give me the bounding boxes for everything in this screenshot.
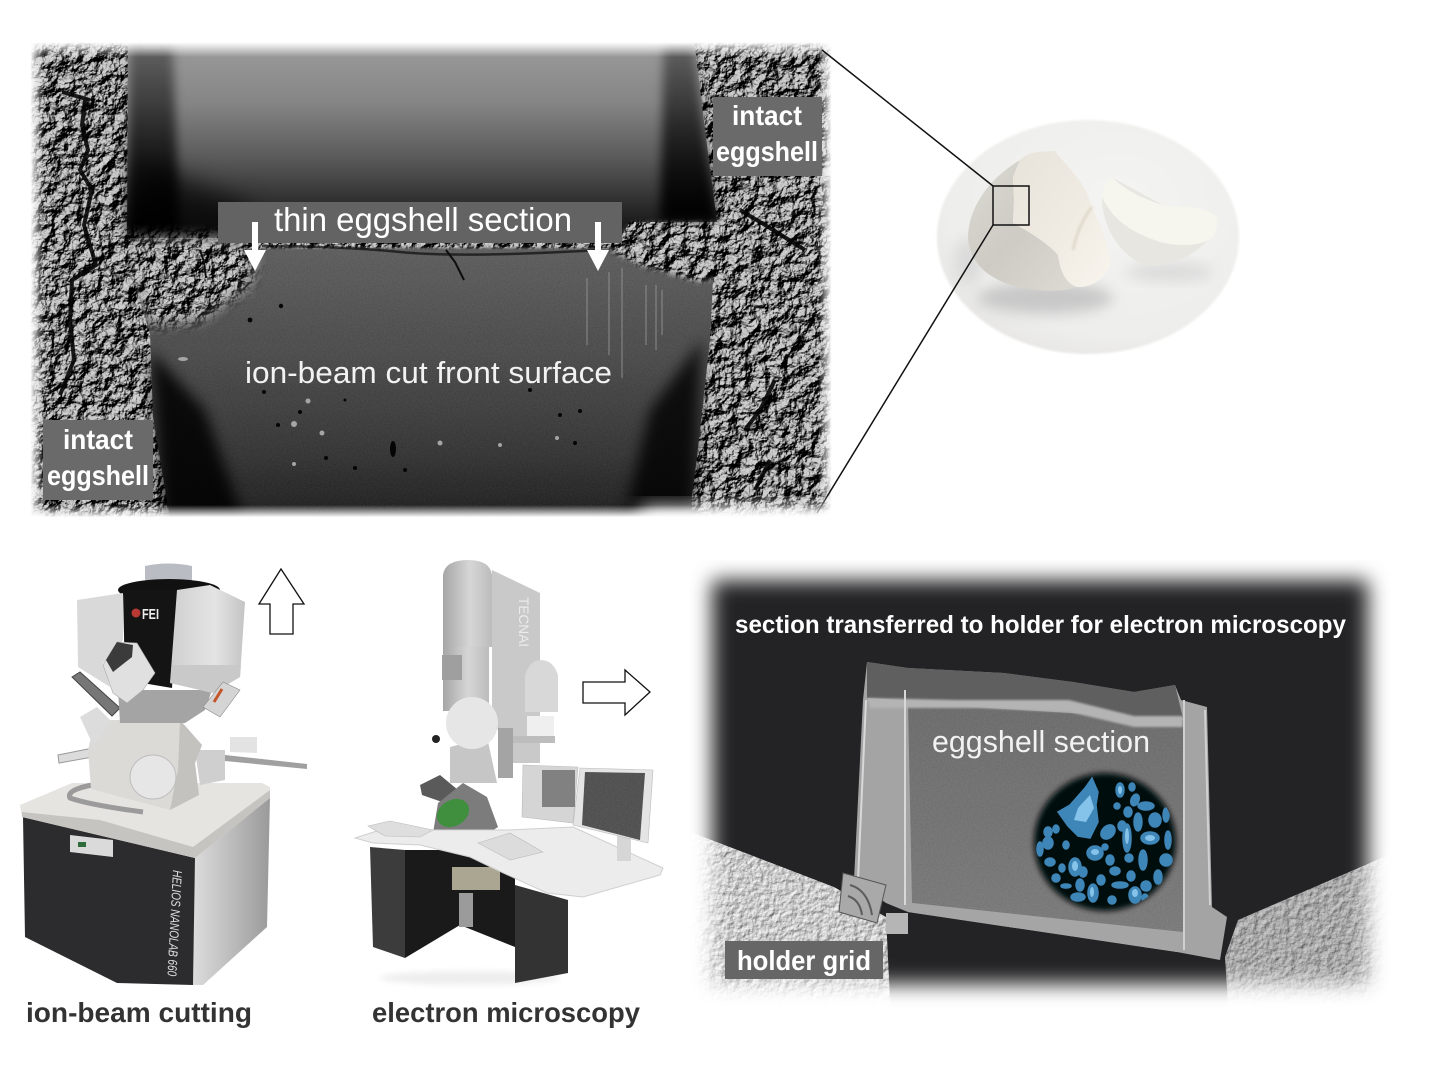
FEI brand: FEI — [142, 606, 159, 623]
icon: right outline arrow — [583, 670, 650, 715]
focus knob — [432, 735, 440, 743]
right detector — [203, 682, 240, 717]
bright pores — [178, 357, 559, 466]
crystal background — [1034, 773, 1176, 911]
right rod — [225, 755, 307, 769]
caption: ion-beam cutting: ion-beam cutting — [26, 997, 252, 1028]
intact eggshell label, upper right — [713, 97, 822, 176]
post under section — [886, 913, 908, 934]
model label: HELIOS NANOLAB 660 — [164, 870, 185, 977]
ion-beam microscope — [20, 564, 307, 985]
clamp swirl — [848, 885, 872, 915]
right monitor image — [582, 772, 645, 840]
feathered white vignette — [676, 544, 1404, 1020]
face lower-left shadow — [150, 350, 245, 525]
left wedge — [80, 707, 112, 745]
left strip highlights — [858, 690, 905, 905]
monitor stand — [617, 833, 631, 861]
middle column — [443, 647, 489, 711]
blue crystal circle — [1034, 773, 1176, 911]
pipe — [498, 728, 513, 778]
grid clamp — [839, 873, 886, 923]
transmission electron microscope — [355, 560, 663, 985]
crystal highlights — [1072, 786, 1155, 897]
right monitor frame — [573, 768, 653, 843]
intact eggshell label, upper right: intact — [732, 100, 802, 131]
central module — [103, 642, 155, 703]
lower body — [450, 737, 497, 783]
crystal blobs — [1037, 778, 1172, 904]
green viewing screen — [432, 793, 474, 833]
inner shell fold — [1073, 207, 1092, 250]
section frame — [854, 662, 1227, 960]
section label: eggshell section — [932, 724, 1150, 759]
left trench wall shadow — [128, 30, 180, 240]
upper column — [443, 560, 492, 647]
left arm — [72, 672, 120, 716]
thin section label — [218, 201, 622, 243]
dome — [433, 783, 498, 843]
right leg — [515, 885, 568, 983]
intact eggshell label, lower left: eggshell — [47, 460, 149, 491]
feathered edge: left — [10, 20, 44, 556]
chamber shade — [170, 720, 202, 810]
lens sphere — [446, 697, 498, 749]
bright crust band — [867, 698, 1183, 727]
module dark cap — [106, 642, 133, 672]
tank collar — [527, 716, 554, 736]
chamber door cylinder — [130, 755, 176, 799]
caption: electron microscopy: electron microscopy — [372, 997, 640, 1028]
panel heading: section transferred to holder for electron microscopy — [735, 611, 1346, 639]
shadow under small shell — [1126, 263, 1214, 281]
status indicator — [78, 842, 86, 847]
feathered edge: right — [818, 20, 852, 556]
surface label: ion-beam cut front surface — [245, 355, 612, 390]
TECNAI label: TECNAI — [516, 597, 532, 647]
ion-beam cut face — [130, 238, 715, 536]
chamber — [88, 720, 202, 810]
neck — [118, 690, 212, 723]
status panel — [70, 835, 113, 857]
rough intact eggshell surface — [14, 27, 848, 536]
cabinet side — [193, 797, 270, 985]
photo: broken eggshell — [937, 120, 1239, 354]
left hood — [77, 593, 123, 687]
section face — [908, 703, 1183, 932]
binocular — [420, 775, 458, 803]
icon: up outline arrow — [259, 569, 304, 634]
holder grid label: holder grid — [737, 945, 871, 976]
panel: ion-beam cut eggshell micrograph — [31, 42, 831, 517]
back tower — [492, 570, 540, 763]
large shell exterior — [968, 160, 1077, 291]
selection box on egg — [993, 186, 1029, 225]
side tank — [525, 660, 558, 712]
right hood — [170, 585, 245, 693]
thin section label: thin eggshell section — [274, 201, 572, 238]
left rod — [58, 748, 93, 763]
black column front — [123, 590, 178, 688]
section top crust — [867, 662, 1183, 720]
shadow under large shell — [977, 282, 1113, 314]
right strip highlights — [1184, 700, 1210, 950]
FEI logo dot — [132, 608, 140, 618]
milling streaks — [587, 268, 662, 378]
holder grid left — [680, 828, 891, 1020]
shadow left of large shell — [954, 238, 982, 286]
zoom lines from egg to micrograph — [817, 50, 993, 513]
floor shadow — [380, 971, 560, 985]
left down arrow — [244, 222, 266, 271]
black column top — [118, 579, 220, 601]
tan components — [452, 867, 500, 890]
column box — [442, 655, 462, 680]
right trench wall shadow — [660, 30, 717, 222]
cabinet top slab — [20, 783, 270, 858]
support arm — [513, 736, 555, 743]
lower side unit — [195, 750, 225, 785]
inner recess — [405, 850, 515, 958]
holder grid right — [1225, 850, 1400, 1020]
right down arrow — [587, 222, 609, 271]
small shell exterior — [1102, 178, 1217, 266]
cabinet front — [23, 817, 195, 985]
desk — [355, 827, 663, 897]
right hood lower band — [170, 665, 241, 693]
left monitor frame — [522, 765, 578, 823]
left leg — [370, 847, 405, 958]
milled trench — [127, 30, 717, 238]
detector stripe — [214, 689, 222, 702]
silver column cap — [145, 564, 192, 582]
handle loop — [69, 785, 143, 812]
rough rim — [122, 220, 720, 334]
left monitor image — [542, 770, 575, 807]
right side box — [230, 737, 257, 753]
intact eggshell label, lower left — [43, 420, 153, 500]
intact eggshell label, upper right: eggshell — [716, 136, 818, 167]
dark background — [690, 560, 1390, 1010]
edge cracks — [200, 246, 600, 280]
feathered edge: bottom — [10, 505, 852, 556]
small shell interior — [1102, 178, 1217, 245]
left keypad — [368, 821, 433, 837]
feathered edge: top — [10, 20, 852, 57]
intact eggshell label, lower left: intact — [63, 424, 133, 455]
eggshell surface cracks — [60, 92, 805, 490]
face lower-right shadow — [622, 340, 702, 525]
photo background — [937, 120, 1239, 354]
bottom band — [908, 903, 1181, 952]
central cylinder — [459, 893, 473, 927]
panel: section on holder — [676, 544, 1404, 1020]
slab front edge — [22, 790, 270, 858]
large shell interior — [1013, 151, 1110, 287]
dark pores — [248, 304, 582, 472]
trench lower-left shadow — [130, 160, 250, 240]
right keypad — [478, 833, 543, 860]
